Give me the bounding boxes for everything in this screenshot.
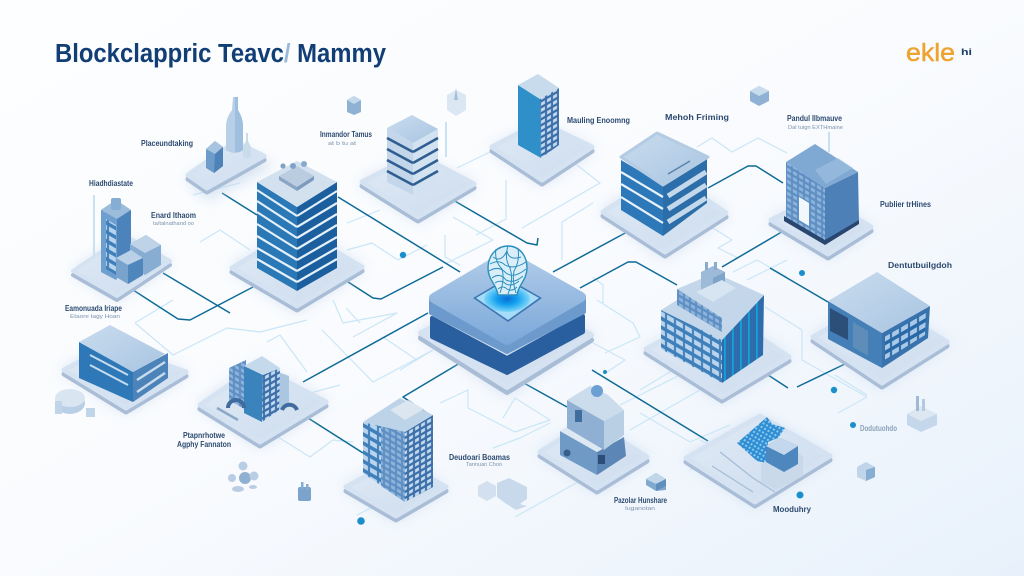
labels: Hiadhdiastate (89, 179, 133, 188)
logo: hi (961, 47, 972, 57)
labels: Ptapnrhotwe (183, 431, 225, 440)
small icon: stacked cube (347, 96, 361, 115)
labels: Placeundtaking (141, 139, 193, 148)
labels: Agphy Fannaton (177, 440, 231, 449)
labels (65, 113, 952, 514)
labels: Eamonuada Iriape (65, 304, 122, 313)
brain mesh globe (488, 246, 527, 295)
labels: Etaore tagy Hoan (70, 314, 120, 320)
small icon: drum with blocks (55, 389, 95, 417)
labels: Enard Ithaom (151, 211, 196, 220)
small icon: pale cube (447, 88, 466, 116)
building: bottom tower (343, 398, 449, 521)
labels: Pandul Ilbmauve (787, 114, 842, 123)
blue node dots (357, 252, 856, 525)
labels: Mauling Enoomng (567, 116, 630, 125)
building: left tower with annexe (71, 198, 172, 300)
labels: ta/talnathand oo (153, 221, 194, 227)
title: Blockclappric Teavc/ Mammy (55, 40, 387, 68)
labels: Mooduhry (773, 505, 812, 514)
building: top middle block (359, 115, 477, 222)
small icon: cube (646, 473, 666, 491)
building: striped central tower (229, 161, 365, 312)
building: central right with rooftop unit (643, 262, 792, 402)
labels: Deudoari Boamas (449, 453, 510, 462)
building: left warehouse (61, 325, 189, 413)
labels: at b tu at (328, 141, 357, 147)
building: right slate block (768, 144, 874, 258)
building: bottles and canister (185, 97, 275, 200)
labels: Pazolar Hunshare (614, 496, 667, 505)
small icon: ring cluster (228, 462, 258, 492)
logo (906, 39, 972, 67)
small icon: hex tower (907, 396, 937, 432)
small icon: connector plug (298, 482, 311, 501)
labels: Iuganotan (625, 506, 655, 512)
logo: ekle (906, 39, 955, 67)
labels: Tannuan Choo (466, 462, 502, 468)
small icon: grid cube (857, 462, 875, 481)
labels: Mehoh Friming (665, 113, 729, 122)
central hub platform (417, 246, 595, 395)
labels: Publier trHines (880, 200, 931, 209)
building: right flat warehouse (810, 272, 950, 388)
small icon: pale cubes (478, 478, 527, 510)
small icon: stacked trays (750, 86, 769, 106)
labels: Inmandor Tamus (320, 130, 372, 139)
labels: Dal tuign EXTHmaine (788, 125, 843, 131)
building: top blue tower (489, 74, 595, 185)
building: stacked layers (600, 133, 729, 258)
building: robot machine (537, 385, 650, 493)
labels: Dentutbuilgdoh (888, 261, 952, 270)
light circuit lines (94, 122, 867, 517)
dark circuit connectors (130, 166, 847, 453)
blue glowing chip (473, 278, 542, 322)
building: bottom left twin towers (197, 356, 329, 447)
building: data mesh (683, 415, 833, 507)
labels: Dodutuohdo (860, 424, 897, 433)
